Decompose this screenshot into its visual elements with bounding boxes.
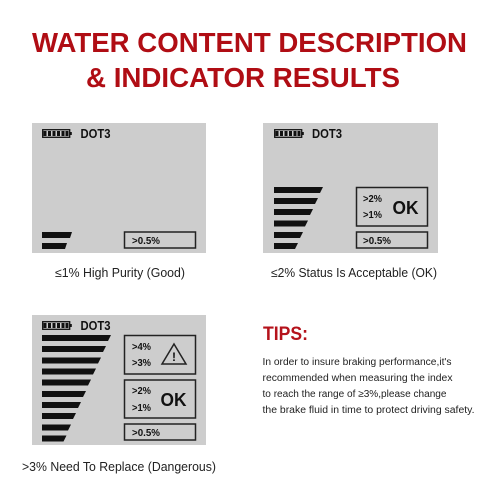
DOT3 label: DOT3	[80, 127, 111, 141]
title: & INDICATOR RESULTS	[86, 62, 400, 93]
box: warning	[124, 336, 196, 374]
box: OK	[356, 188, 428, 226]
box: 0.5%: >0.5%	[132, 428, 160, 439]
box: 0.5%	[356, 232, 428, 248]
tips text: the brake fluid in time to protect driving safety.	[262, 405, 474, 416]
tips text: to reach the range of ≥3%,please change	[262, 389, 447, 400]
icon: warning triangle: !	[172, 350, 176, 364]
level bars	[42, 232, 72, 249]
box: warning: >4%	[132, 342, 151, 353]
icon: battery	[275, 130, 304, 137]
panel: high purity display	[32, 123, 206, 253]
tips heading: TIPS:	[263, 323, 308, 345]
box: 0.5%: >0.5%	[363, 236, 391, 247]
box: OK: >2%	[132, 386, 151, 397]
title: WATER CONTENT DESCRIPTION	[32, 27, 467, 58]
level bars	[42, 335, 111, 442]
DOT3 label: DOT3	[80, 319, 111, 333]
caption: high purity: ≤1% High Purity (Good)	[55, 266, 185, 280]
box: 0.5%: >0.5%	[132, 236, 160, 247]
panel: acceptable display	[263, 123, 438, 253]
icon: battery	[43, 322, 72, 329]
box: OK	[124, 380, 196, 418]
box: 0.5%	[124, 424, 196, 440]
caption: dangerous: >3% Need To Replace (Dangerous)	[22, 460, 216, 474]
box: OK: >2%	[363, 194, 382, 205]
icon: battery	[43, 130, 72, 137]
tips text	[262, 357, 474, 416]
box: OK: OK	[160, 389, 187, 410]
DOT3 label: DOT3	[312, 127, 342, 141]
box: OK: >1%	[132, 403, 151, 414]
box: warning: >3%	[132, 358, 151, 369]
panel: dangerous display	[32, 315, 206, 445]
title	[32, 27, 467, 93]
tips text: In order to insure braking performance,it's	[262, 357, 452, 368]
level bars	[274, 187, 323, 249]
caption: acceptable: ≤2% Status Is Acceptable (OK)	[271, 266, 437, 280]
tips text: recommended when measuring the index	[262, 373, 452, 384]
box: OK: >1%	[363, 210, 382, 221]
box: OK: OK	[392, 197, 419, 218]
box: 0.5%	[124, 232, 196, 248]
